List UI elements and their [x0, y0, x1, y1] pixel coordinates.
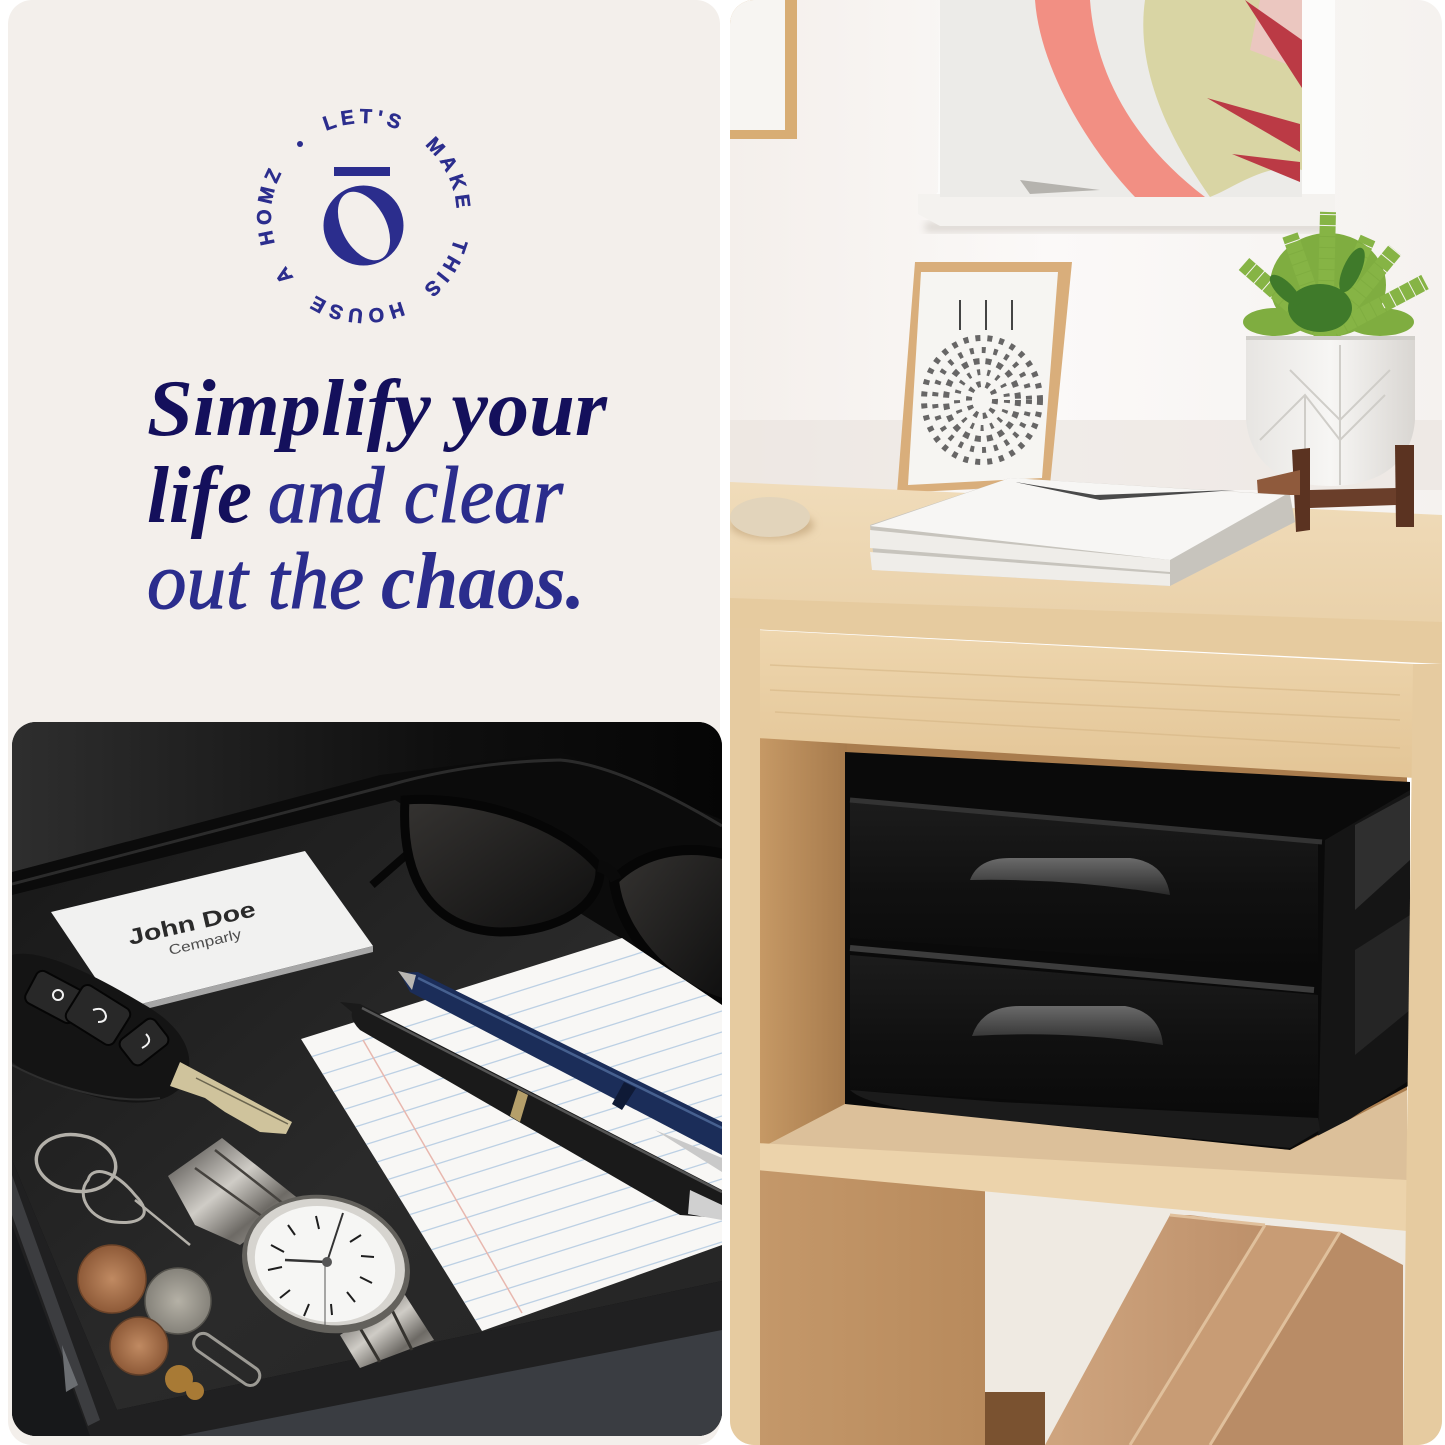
- pot: [1246, 338, 1415, 486]
- photo: wooden desk scene: [730, 0, 1442, 1445]
- stacked books: [870, 478, 1295, 586]
- plant in white pot: [1243, 212, 1425, 486]
- lower left side panel: [757, 1160, 985, 1445]
- card company: Cemparly: [167, 926, 243, 958]
- wall: [730, 0, 1442, 520]
- watch band upper: [168, 1138, 300, 1245]
- wooden stand: [1257, 445, 1414, 532]
- left wall frame: [730, 0, 797, 139]
- photo: organized drawer contents: [12, 722, 730, 1436]
- headline: out the: [147, 538, 364, 626]
- drawer mat surface: [12, 800, 722, 1410]
- logo badge: [256, 108, 471, 324]
- print: dot pattern: [924, 338, 1040, 462]
- folders: [1045, 1215, 1403, 1445]
- lower drawer: [850, 948, 1318, 1118]
- circular slogan text: LET'S: [322, 108, 401, 131]
- headline: Simplify your: [147, 365, 608, 453]
- headline: chaos.: [381, 538, 585, 626]
- unit side panel: [1318, 790, 1410, 1140]
- watch band lower: [340, 1295, 434, 1368]
- large framed art: [918, 0, 1335, 232]
- watch case and dial: [242, 1194, 410, 1334]
- sunglasses: [372, 799, 730, 1005]
- headline: [147, 365, 608, 626]
- headline: life: [147, 452, 252, 540]
- desk top: [730, 482, 1442, 664]
- black pen: [340, 1002, 722, 1220]
- circular slogan text: THIS: [425, 242, 468, 296]
- card name: John Doe: [126, 896, 258, 950]
- wrist watch: [168, 1138, 434, 1368]
- car key fob: [12, 954, 292, 1134]
- circular slogan text: A: [277, 266, 294, 282]
- middle shelf: [757, 1090, 1407, 1231]
- pebble: [730, 497, 814, 539]
- key rings: [32, 1128, 190, 1245]
- black storage unit: [845, 752, 1410, 1150]
- plant leaves: [1243, 233, 1414, 337]
- logo mark: letter o with macron: [324, 167, 404, 269]
- circular slogan text: HOMZ: [256, 168, 282, 246]
- small framed print: [897, 262, 1072, 493]
- business card: [51, 851, 373, 1016]
- circular slogan text: [256, 108, 471, 324]
- lower compartment back wall: [985, 1180, 1410, 1445]
- drawer front: [757, 630, 1415, 778]
- desk leg right: [1403, 664, 1442, 1445]
- headline: and clear: [268, 452, 564, 540]
- art: coral sweep: [1035, 0, 1205, 197]
- paperclip: [192, 1332, 262, 1387]
- coins: [78, 1245, 211, 1400]
- notepad paper: [301, 938, 722, 1331]
- cabinet interior: [757, 735, 1407, 1165]
- upper drawer: [850, 800, 1322, 970]
- tray top rim: [12, 722, 722, 884]
- navy pen: [398, 971, 722, 1172]
- desk leg left: [730, 628, 760, 1445]
- tray front lip: [12, 1160, 722, 1436]
- art: red leaves: [1207, 0, 1302, 182]
- circular slogan text: MAKE: [426, 136, 471, 208]
- panel: cream headline panel: [8, 0, 720, 1445]
- circular slogan text: HOUSE: [310, 296, 405, 324]
- art: olive shape: [1143, 0, 1302, 197]
- key blade: [170, 1062, 292, 1134]
